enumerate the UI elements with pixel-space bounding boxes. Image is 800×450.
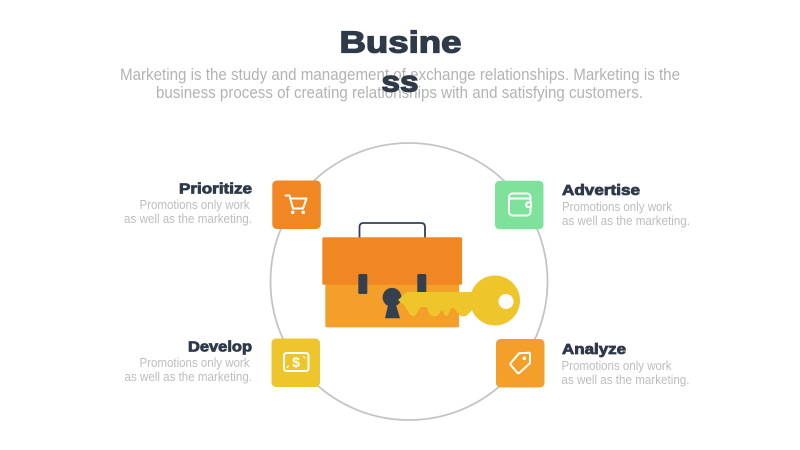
central circle (270, 143, 548, 420)
description (124, 197, 252, 226)
icon tile: money (272, 338, 320, 387)
description: Promotions only work (140, 197, 250, 212)
description: Promotions only work (562, 358, 672, 373)
subtitle: Marketing is the study and management of exchange relationships. Marketing is the (120, 66, 680, 84)
title (340, 24, 462, 98)
subtitle: business process of creating relationships with and satisfying customers. (156, 84, 643, 102)
item: Prioritize (124, 180, 321, 229)
icon: wallet (509, 194, 531, 216)
icon: tag (510, 353, 530, 373)
key hole (498, 294, 514, 309)
left latch (358, 274, 367, 294)
description (124, 355, 252, 384)
description: Promotions only work (140, 355, 250, 370)
icon tile: tag (496, 339, 544, 388)
description: as well as the marketing. (124, 369, 252, 384)
subtitle (120, 66, 680, 102)
key (398, 276, 520, 326)
description (562, 358, 690, 387)
icon: money (284, 353, 308, 371)
item: Analyze (496, 339, 690, 388)
item: Advertise (495, 181, 690, 229)
description: as well as the marketing. (562, 213, 690, 228)
briefcase flap (322, 237, 462, 285)
label: Advertise (562, 182, 640, 199)
briefcase handle (360, 223, 425, 238)
item: Develop: $ (292, 354, 300, 370)
briefcase body (325, 280, 459, 327)
right latch (417, 274, 426, 294)
title: ss (382, 66, 418, 98)
description: Promotions only work (562, 199, 672, 214)
icon tile: cart (272, 180, 321, 229)
description: as well as the marketing. (124, 211, 252, 226)
description (562, 199, 690, 228)
icon tile: wallet (495, 181, 544, 229)
keyhole (383, 288, 401, 318)
item: Develop (124, 338, 320, 387)
label: Prioritize (179, 180, 252, 198)
icon: cart (286, 196, 306, 213)
icon: briefcase with key (322, 223, 520, 327)
label: Develop (188, 338, 252, 356)
description: as well as the marketing. (562, 372, 690, 387)
label: Analyze (562, 341, 626, 358)
title: Busine (340, 24, 462, 60)
